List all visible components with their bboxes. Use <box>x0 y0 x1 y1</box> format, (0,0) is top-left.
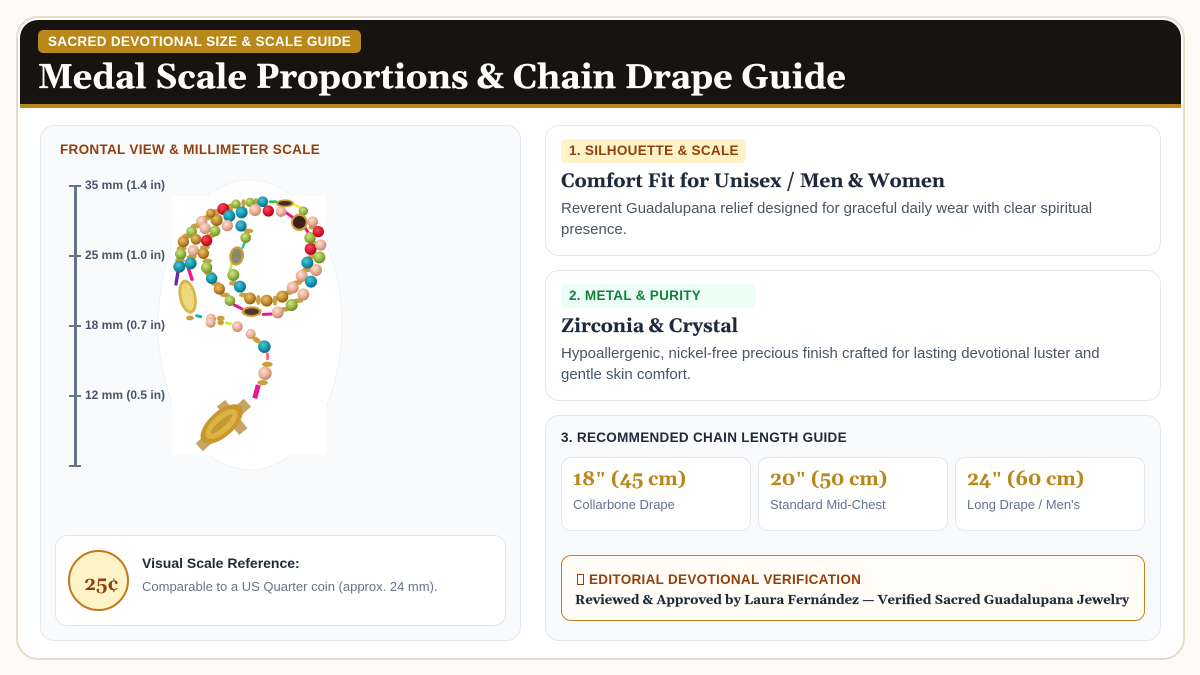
icon: quarter coin: 25¢ <box>84 573 119 597</box>
panel heading: frontal view: FRONTAL VIEW & MILLIMETER SCALE <box>60 142 320 157</box>
ruler label: 35 mm: 35 mm (1.4 in) <box>85 178 165 192</box>
ruler label: 25 mm: 25 mm (1.0 in) <box>85 248 165 262</box>
callout: editorial verification <box>561 555 1145 621</box>
ruler label: 18 mm: 18 mm (0.7 in) <box>85 318 165 332</box>
panel: chain length guide <box>545 415 1161 641</box>
ruler label: 12 mm: 12 mm (0.5 in) <box>85 388 165 402</box>
callout text: Reviewed & Approved by Laura Fernández — Verified Sacred Guadalupana Jewelry <box>575 593 1129 609</box>
heading: zirconia and crystal: Zirconia & Crystal <box>561 315 738 339</box>
card: 18 inch: Collarbone Drape <box>573 497 675 512</box>
card: 20 inch: 20" (50 cm) <box>770 468 887 492</box>
tag: silhouette and scale: 1. SILHOUETTE & SCALE <box>569 143 739 158</box>
card: 18 inch: 18" (45 cm) <box>573 468 686 492</box>
tag: metal and purity: 2. METAL & PURITY <box>569 288 701 303</box>
card: 24 inch: Long Drape / Men's <box>967 497 1080 512</box>
heading: comfort fit: Comfort Fit for Unisex / Men & Women <box>561 170 945 194</box>
panel: visual scale reference <box>55 535 506 626</box>
panel: frontal view <box>40 125 521 641</box>
lower chain and crucifix <box>194 318 273 451</box>
panel: silhouette and scale <box>545 125 1161 256</box>
description: zirconia and crystal: Hypoallergenic, nickel-free precious finish crafted for lasting devotional luster and gentle skin comfort. <box>561 345 1100 383</box>
header badge: SACRED DEVOTIONAL SIZE & SCALE GUIDE <box>48 34 351 49</box>
description: comfort fit: Reverent Guadalupana relief designed for graceful daily wear with clear spiritual presence. <box>561 200 1092 238</box>
panel: metal and purity <box>545 270 1161 401</box>
title: Medal Scale Proportions & Chain Drape Guide <box>38 56 846 100</box>
upper rosary loops <box>173 196 326 324</box>
card: 24 inch <box>955 457 1145 531</box>
rosary product image <box>158 180 342 470</box>
chain guide heading: 3. RECOMMENDED CHAIN LENGTH GUIDE <box>561 430 847 445</box>
image white background <box>172 196 326 455</box>
callout heading: EDITORIAL DEVOTIONAL VERIFICATION <box>589 572 861 587</box>
card: 24 inch: 24" (60 cm) <box>967 468 1084 492</box>
chart: millimeter scale ruler <box>69 185 81 467</box>
tag: silhouette and scale <box>561 139 746 163</box>
tag: metal and purity <box>561 284 756 308</box>
oval backdrop <box>158 180 342 470</box>
scale reference heading: Visual Scale Reference: <box>142 555 300 571</box>
card: 18 inch <box>561 457 751 531</box>
scale reference text: Comparable to a US Quarter coin (approx. 24 mm). <box>142 579 438 594</box>
card: 20 inch: Standard Mid-Chest <box>770 497 886 512</box>
icon: quarter coin <box>68 550 129 611</box>
header badge <box>38 30 361 53</box>
card: 20 inch <box>758 457 948 531</box>
header band <box>20 20 1181 108</box>
